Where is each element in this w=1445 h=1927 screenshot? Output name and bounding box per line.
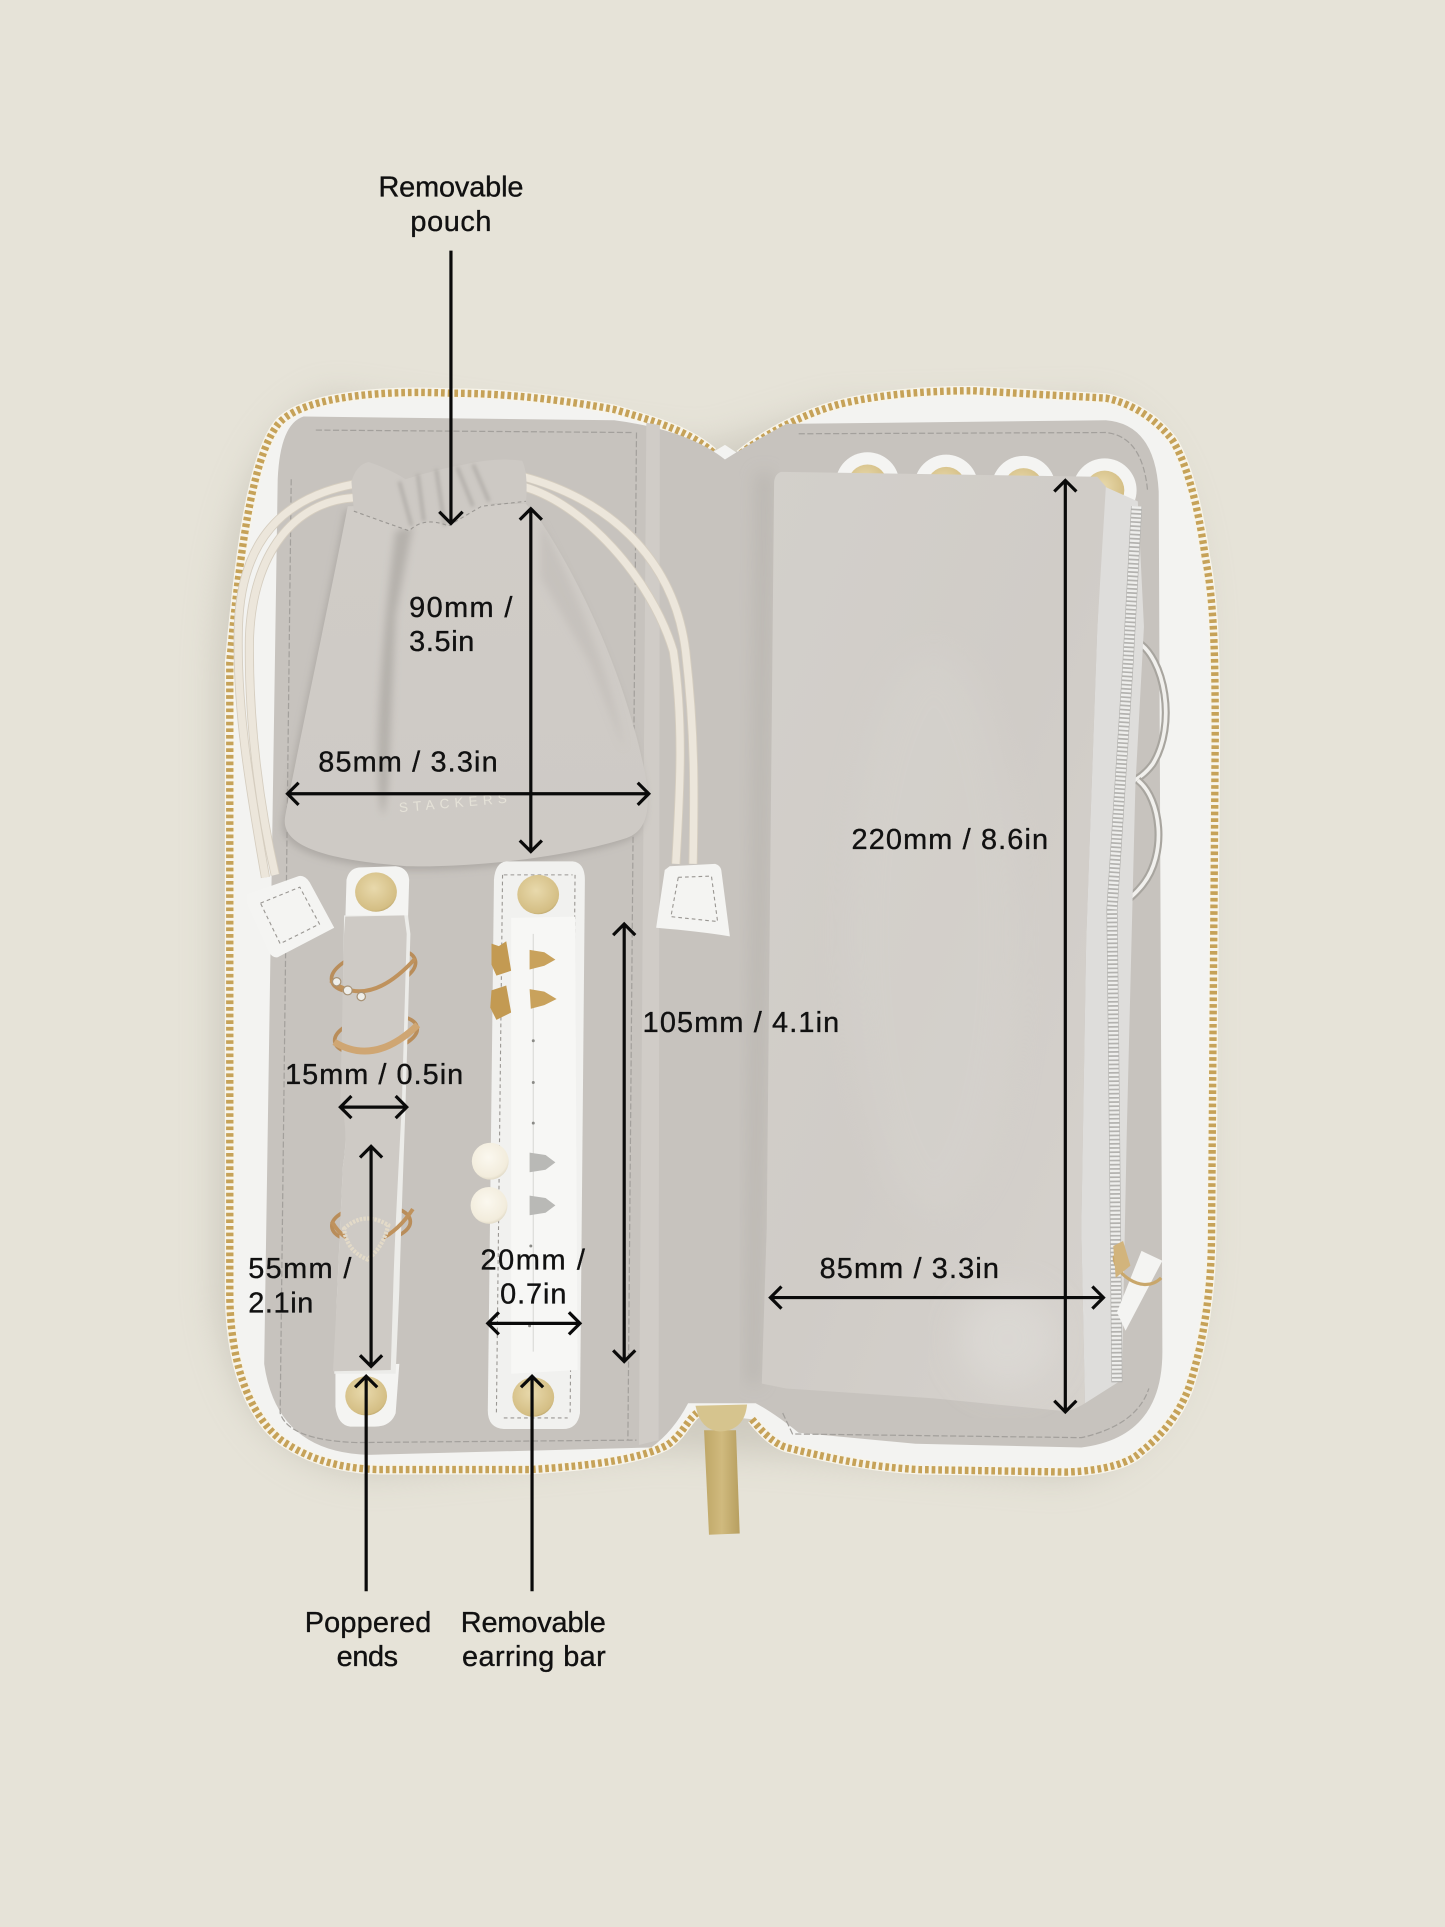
arrow: removable pouch pointer bbox=[439, 251, 463, 523]
pouch shadow bbox=[282, 507, 645, 870]
arrow: strap length bbox=[360, 1146, 382, 1366]
removable earring bar bbox=[471, 861, 585, 1429]
white outer tape bbox=[230, 391, 1215, 1472]
arrow: bar width bbox=[488, 1312, 580, 1334]
bottom white tab bbox=[335, 1364, 399, 1427]
pouch body bbox=[285, 504, 648, 866]
arrow: pouch width bbox=[288, 783, 649, 805]
raised bar bbox=[511, 917, 578, 1374]
label: flap width: 85mm / 3.3in bbox=[820, 1253, 999, 1285]
ring strap bbox=[327, 866, 420, 1427]
label: poppered ends: Poppered bbox=[305, 1607, 431, 1639]
arrow: strap width bbox=[340, 1096, 407, 1118]
label: pouch height: 3.5in bbox=[409, 626, 474, 658]
velvet pocket flap bbox=[762, 472, 1106, 1411]
label: bar width: 0.7in bbox=[500, 1279, 566, 1311]
zip teeth bbox=[230, 391, 1215, 1472]
silver hoop earrings bbox=[1116, 553, 1166, 907]
leather backing bbox=[488, 861, 585, 1429]
stackers logo: STACKERS bbox=[398, 791, 507, 815]
drawstring cord, right bbox=[523, 477, 694, 864]
lining stitching bbox=[280, 430, 1149, 1443]
label: pouch height bbox=[409, 592, 513, 658]
label: removable earring bar: earring bar bbox=[462, 1641, 606, 1673]
gold stud backs bbox=[530, 950, 557, 1009]
label: pouch height: 90mm / bbox=[409, 592, 513, 624]
label: strap length: 55mm / bbox=[248, 1253, 352, 1285]
arrow: flap height bbox=[1054, 480, 1076, 1412]
label: flap height: 220mm / 8.6in bbox=[852, 824, 1048, 856]
velvet strap bbox=[334, 915, 410, 1374]
drawstring cord, left bbox=[238, 484, 354, 877]
bottom popper bbox=[512, 1377, 554, 1417]
label: bar width bbox=[480, 1244, 586, 1311]
removable pouch bbox=[282, 460, 648, 870]
gathered neck bbox=[351, 460, 527, 531]
top popper bbox=[517, 875, 559, 914]
right panel fold shadow bbox=[747, 473, 772, 1386]
label: poppered ends bbox=[305, 1607, 431, 1673]
ring three bbox=[332, 1209, 413, 1243]
open jewellery case bbox=[230, 391, 1215, 1472]
silver stud backs bbox=[530, 1153, 555, 1215]
label: removable pouch: pouch bbox=[410, 206, 491, 238]
label: removable earring bar: Removable bbox=[461, 1607, 606, 1639]
label: strap length bbox=[248, 1253, 352, 1319]
label: strap length: 2.1in bbox=[248, 1287, 313, 1319]
pin holes bbox=[528, 1039, 535, 1327]
arrow: poppered ends pointer bbox=[355, 1376, 377, 1591]
label: poppered ends: ends bbox=[337, 1641, 398, 1673]
arrow: earring bar pointer bbox=[521, 1376, 543, 1591]
bottom popper bbox=[345, 1376, 387, 1416]
arrow: flap width bbox=[770, 1287, 1103, 1309]
top white tab bbox=[345, 866, 409, 922]
label: removable pouch bbox=[378, 172, 523, 238]
brass zip pull tab bbox=[695, 1404, 747, 1535]
label: bar length: 105mm / 4.1in bbox=[643, 1007, 839, 1039]
ring two bbox=[334, 1025, 418, 1051]
label: strap width: 15mm / 0.5in bbox=[285, 1059, 463, 1091]
magazine eyelets bbox=[836, 452, 1137, 522]
pouch fold bbox=[378, 526, 413, 816]
ring one bbox=[331, 958, 415, 1001]
label: removable pouch: Removable bbox=[378, 172, 523, 204]
ring backs bbox=[327, 941, 420, 1000]
soft shadow behind the case bbox=[216, 396, 1203, 1477]
label: bar width: 20mm / bbox=[480, 1244, 586, 1276]
zip puller and tag bbox=[1113, 1241, 1162, 1331]
label: pouch width: 85mm / 3.3in bbox=[318, 747, 498, 779]
velvet lining bbox=[264, 417, 1162, 1455]
label: removable earring bar bbox=[461, 1607, 606, 1673]
heart ring bbox=[344, 1219, 388, 1259]
centre gutter bbox=[639, 423, 660, 1445]
top popper bbox=[355, 872, 397, 912]
gold stud fronts bbox=[490, 941, 511, 1020]
cord end, right bbox=[656, 864, 730, 936]
arrow: bar length bbox=[613, 924, 635, 1361]
cord end, left bbox=[247, 876, 334, 957]
zipped pocket tape bbox=[1081, 487, 1144, 1403]
arrow: pouch height bbox=[520, 509, 542, 852]
pearls bbox=[471, 1143, 509, 1224]
